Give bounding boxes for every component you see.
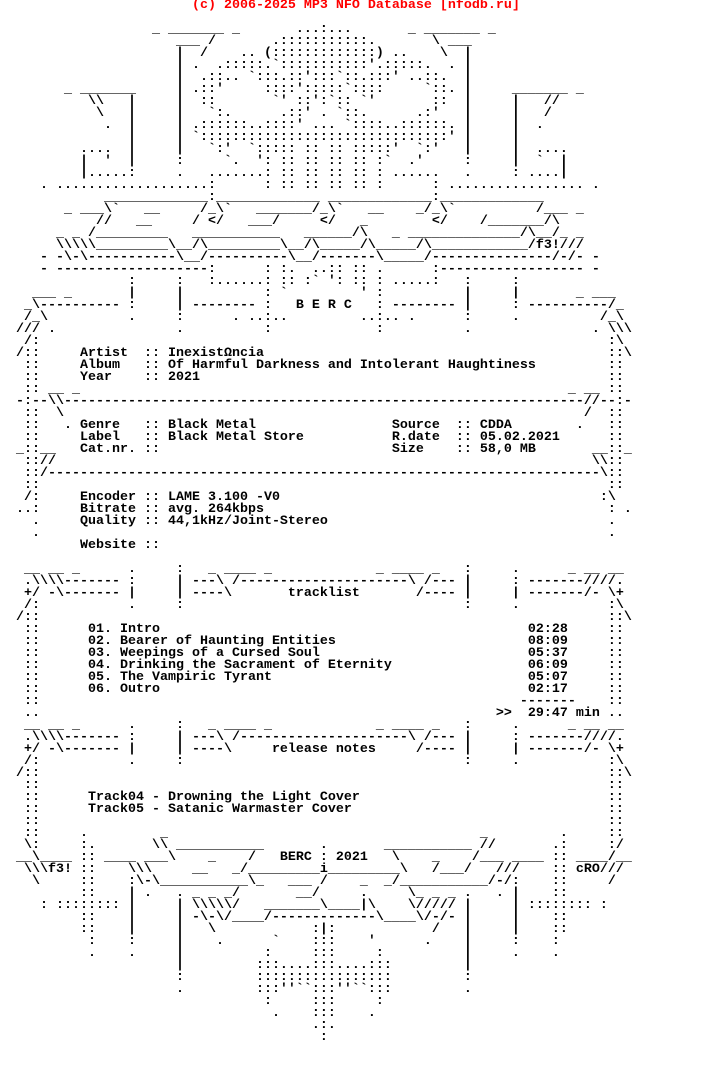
track list with durations: :: 01. Intro 02:28 :: :: 02. Bearer of Haunting Entities 08:09 :: :: 03. Weepings of a Cursed Soul 05:37 :: :: 04. Drinking the Sacrament of Eternity 06:09 :: :: 05. The Vampiric Tyrant 05:07 :: :: 06. Outro 02:17 :: bbox=[0, 622, 624, 697]
heading: tracklist: __ __ _ . : _ ____ _ _ ____ _ : . _ __ __ .\\\\------- : | ---\ /---------------------\ /--- | : -------////. +/ -\------- | | ----\ tracklist /---- | | -------/- \+ /: . : : . :\ /:: ::\ bbox=[0, 562, 632, 625]
heading: BERC group panel: : : :......: :: :` ': :: : .....: : : ___ _ | | : ` ' : | | _ ___ _\---------- : | -------- : B E R C : -------- | : ----------/_ /_\ . : . ..:.. ..:.. . : . /_\ /// . . : : . . \\\ /: :\ bbox=[0, 274, 632, 349]
heading: release notes: __ __ _ . : _ ____ _ _ ____ _ : . _ __ __ .\\\\------- : | ---\ /---------------------\ /--- | : -------////. +/ -\------- | | ----\ release notes /---- | | -------/- \+ /: . : : . :\ /:: ::\ bbox=[0, 718, 632, 781]
text block: release notes: :: :: :: Track04 - Drowning the Light Cover :: :: Track05 - Satanic Warmaster Cover :: :: :: bbox=[0, 778, 624, 829]
divider: lower frame rule: ::// \\:: ::/---------------------------------------------------------------------\:: :: :: bbox=[0, 454, 624, 493]
divider: upper frame rule: :: __ _ _ __ :: -:--\\-----------------------------------------------------------------//--:- :: \ / :: bbox=[0, 382, 632, 421]
text block: artist, album, year: /:: Artist :: InexistΩncia ::\ :: Album :: Of Harmful Darkness and Intolerant Haughtiness :: :: Year :: 2021 :: bbox=[0, 346, 632, 385]
total running time: :: ------- :: .. >> 29:47 min .. bbox=[0, 694, 624, 721]
ascii art: skull logo: _ _______ _ ...:... _ _______ _ ___ / .:::::::::::. \ ___ | / .. (:::::::::::::) .. \ | | . .:::::.`:::::::::::'.:::::. . | | .::.. `:::.::':::`::.:::' ..::. | _ _______ | .::' ::::':::::`:::: `::. | _______ _ \\ | | :: `' ::':`:: `' :: | | // \ | | `:. .::' . `::. .:' | | / . | | .::::::..::::' ... `::::..::::::. | | . | | `:::::::::::::::::::::::::::::::' | | .... | | `:' `::::: :: :: :::::' `:' | | .... | ' | : `. ': :: :: :: :: :` .' : | ` | |.....: . .......: :: :: :: :: : ...... . : ....| . ...................: : :: :: :: :: : : ................. . bbox=[0, 22, 600, 193]
text block: genre, label, source, date, size: :: . Genre :: Black Metal Source :: CDDA . :: :: Label :: Black Metal Store R.date :: 05.02.2021 :: _::__ Cat.nr. :: Size :: 58,0 MB __::_ bbox=[0, 418, 632, 457]
ascii art: footer banner with BERC 2021: :: . _ _ . :: \: :. \\ ___________ . ___________ // .: :/ __\____ :: ____ ___\ _ / BERC : 2021 \ _ /___ ____ :: ____/__ \\\f3! :: \\\ __ _/_________i_________\ /___/ /// :: cRO/// \ :: :\-\___________\_ ___ / _ _/___________/-/: :: / :: | . . _ _ _/ __/ . \_ _ _ . . | :: : :::::::: | | \\\\\/ _______\____|\ \///// | | :::::::: : :: | | -\-\/____/-------------\____\/-/- | | :: :: | | \ :|: / | | :: : : | . ` ::: ' . | : : . . | : ::: : | . . bbox=[0, 826, 632, 961]
text block: encoder details and website: /: Encoder :: LAME 3.100 -V0 :\ ..: Bitrate :: avg. 264kbps : . . Quality :: 44,1kHz/Joint-Stereo . . . Website :: bbox=[0, 490, 632, 553]
ascii art: banner band: _____________:_____________ _____________:_____________ _ ___\` __ /_\` _______/_\` __ _/_\` /___ _ // __ / </ ___/ </ _ </ /_______/\ _ _ /_________ ___________ ______/\ _ ______________/\__/_ _ \\\\\_________\__/\_________\__/\_____/\_____/\____________/f3!/// - -\-\-----------\__/----------\__/-------\_____/---------------/-/- - - -------------------: : :. ..:: :: . :------------------ - bbox=[0, 190, 600, 277]
ascii art: closing cross ornament: | :::....:::....::: | : ::::::::::::::::: : . :::''``:::''``::: . : ::: : . ::: . .:. : bbox=[0, 958, 472, 1045]
